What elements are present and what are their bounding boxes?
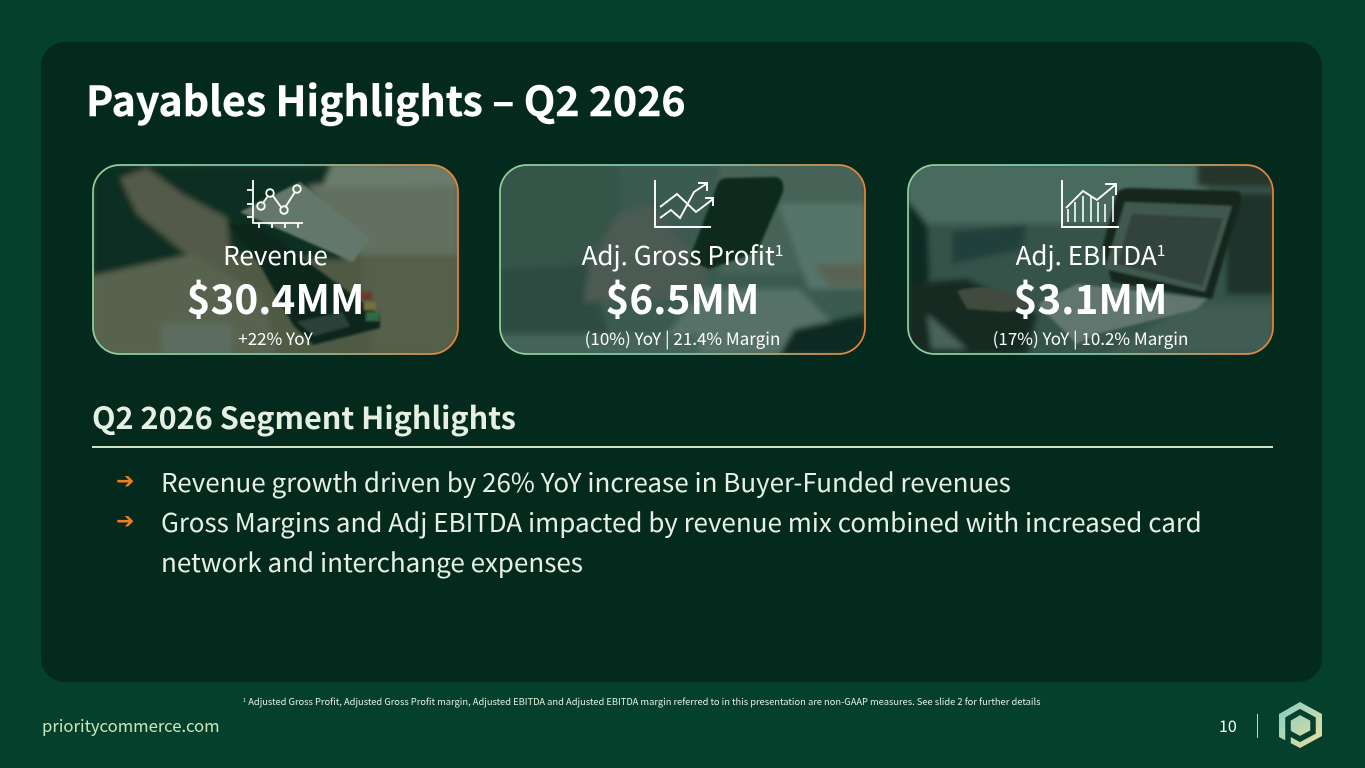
- icon: logo: [1279, 702, 1322, 748]
- panel: adjusted EBITDA card: [907, 164, 1274, 355]
- revenue label: Revenue: [223, 236, 328, 273]
- bullet list: [116, 463, 1202, 580]
- page number: 10: [1219, 713, 1237, 737]
- panel: revenue card: [92, 164, 459, 355]
- revenue change: +22% YoY: [238, 325, 313, 350]
- bullet list: Revenue growth driven by 26% YoY increase in Buyer-Funded revenues: [161, 463, 1011, 500]
- EBITDA change and margin: (17%) YoY | 10.2% Margin: [993, 325, 1188, 350]
- icon: trend arrows: [655, 180, 713, 227]
- website: prioritycommerce.com: [42, 713, 220, 737]
- bullet list: ➔: [116, 509, 134, 534]
- bullet list: ➔: [116, 469, 134, 494]
- section heading: Q2 2026 Segment Highlights: [92, 394, 516, 438]
- footnote: 1 Adjusted Gross Profit, Adjusted Gross Profit margin, Adjusted EBITDA and Adjusted EBITDA margin referred to in this presentation are non-GAAP measures. See slide 2 for further details: [243, 694, 1040, 708]
- gross profit label: Adj. Gross Profit1: [582, 236, 783, 273]
- title: Payables Highlights – Q2 2026: [86, 68, 686, 128]
- bullet list: Gross Margins and Adj EBITDA impacted by revenue mix combined with increased card: [161, 503, 1202, 540]
- main panel: [41, 42, 1322, 682]
- EBITDA label: Adj. EBITDA1: [1016, 236, 1165, 273]
- bullet list: network and interchange expenses: [161, 543, 583, 580]
- panel: adjusted gross profit card: [499, 164, 866, 355]
- EBITDA value: $3.1MM: [1014, 267, 1167, 326]
- gross profit change and margin: (10%) YoY | 21.4% Margin: [585, 325, 780, 350]
- icon: bars with arrow: [1062, 180, 1119, 227]
- revenue value: $30.4MM: [187, 267, 364, 326]
- icon: line chart with dots: [247, 180, 303, 228]
- gross profit value: $6.5MM: [606, 267, 759, 326]
